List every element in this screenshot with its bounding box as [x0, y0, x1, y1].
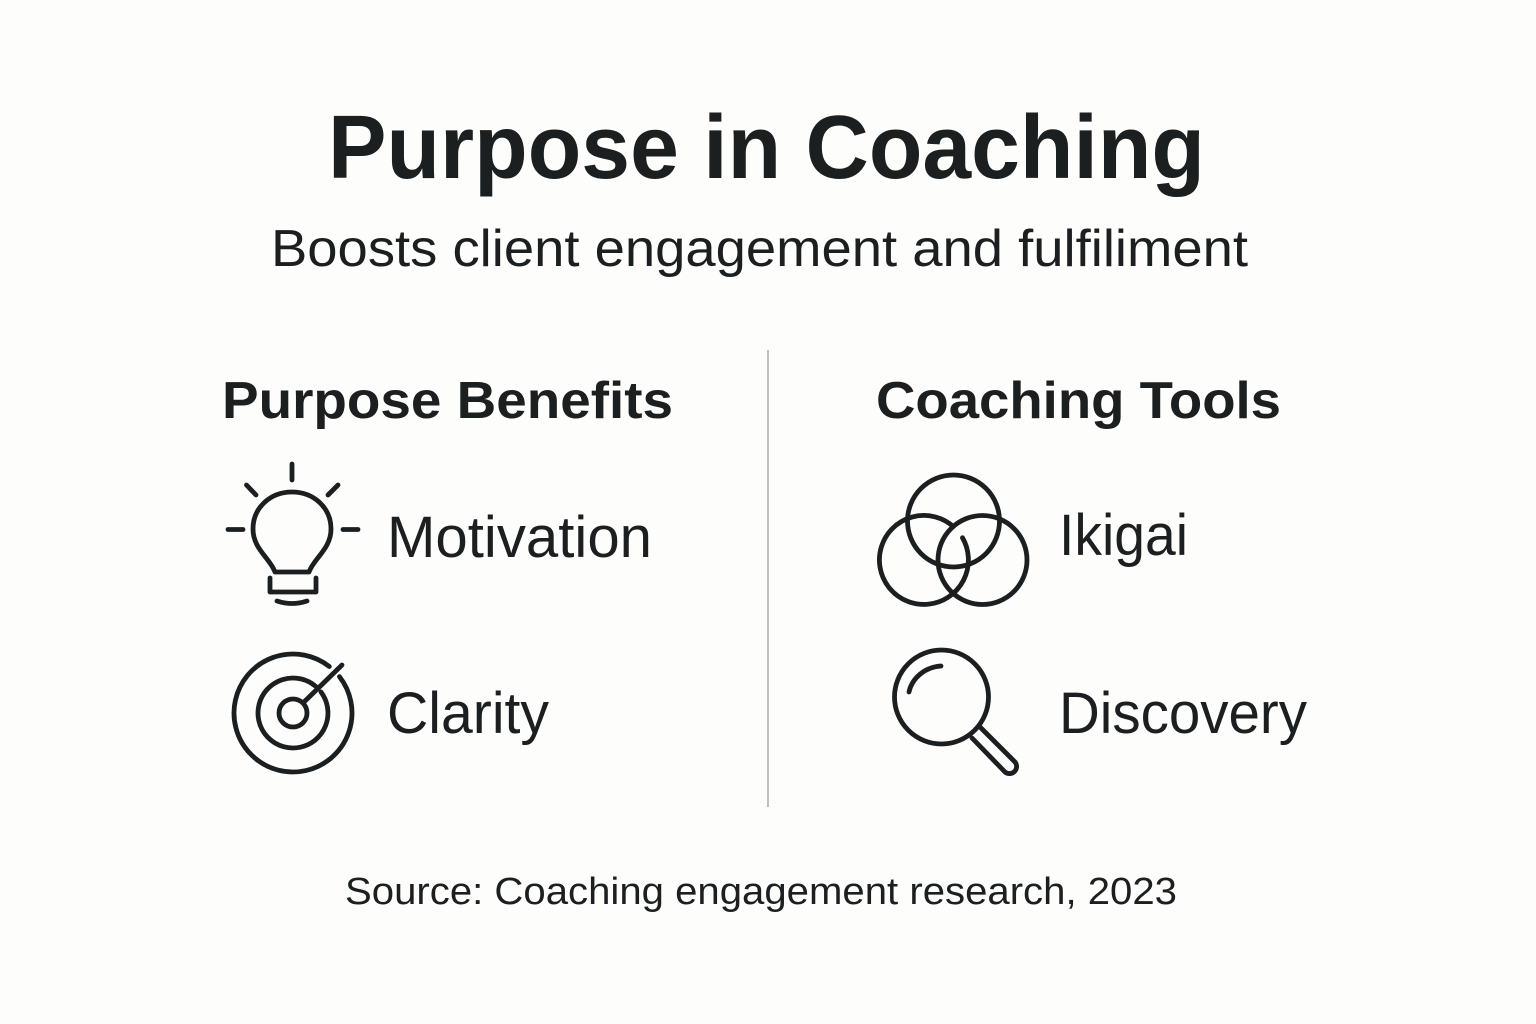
panel: purpose benefits: [222, 372, 673, 772]
label: motivation: Motivation: [387, 505, 652, 570]
icon: target: [234, 654, 352, 772]
icon: light bulb: [228, 464, 358, 604]
icon: ikigai circles: [879, 475, 1027, 604]
label: clarity: Clarity: [387, 681, 549, 746]
heading: coaching tools: Coaching Tools: [876, 372, 1281, 430]
label: discovery: Discovery: [1059, 681, 1307, 746]
subtitle: Boosts client engagement and fulfiliment: [271, 220, 1249, 278]
icon: magnifying glass: [894, 650, 1017, 774]
label: ikigai: Ikigai: [1059, 503, 1188, 568]
source note: Source: Coaching engagement research, 2023: [345, 871, 1177, 913]
heading: purpose benefits: Purpose Benefits: [222, 372, 673, 430]
panel: coaching tools: [876, 372, 1307, 774]
title: Purpose in Coaching: [328, 98, 1205, 198]
